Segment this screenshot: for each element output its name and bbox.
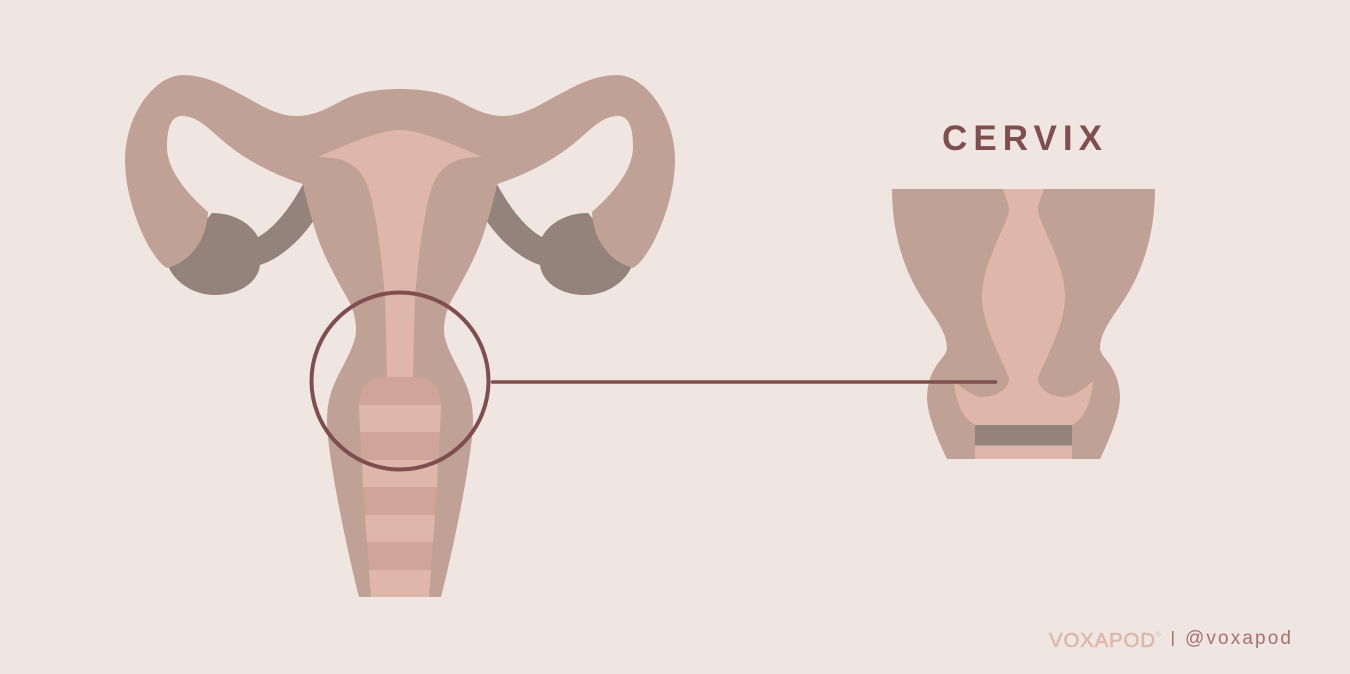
stripe 6 — [365, 515, 435, 542]
diagram: cervix close-up — [892, 189, 1155, 459]
stripe 1 — [359, 377, 441, 405]
stripe 2 — [359, 405, 441, 432]
stripe 4 — [362, 460, 438, 487]
registered mark: ® — [1156, 631, 1162, 639]
highlight circle around cervix — [312, 292, 488, 470]
diagram: female reproductive system — [125, 75, 675, 597]
stripe 8 — [369, 570, 431, 597]
cervix wall left — [892, 189, 1024, 459]
vaginal canal with stripes — [359, 377, 441, 597]
stripe 5 — [363, 487, 437, 515]
separator — [1172, 631, 1174, 646]
brand name: VOXAPOD — [1049, 629, 1155, 652]
uterus and right fallopian tube — [399, 75, 675, 597]
grey band — [975, 425, 1072, 446]
connector line — [492, 380, 996, 384]
uterus and left fallopian tube — [125, 75, 401, 597]
stripe 3 — [360, 432, 440, 460]
heading: CERVIX — [942, 119, 1103, 158]
icon: left ovary and ligament — [168, 184, 314, 295]
stripe 7 — [367, 542, 433, 570]
cervix wall right — [1023, 189, 1155, 459]
icon: right ovary and ligament — [486, 184, 632, 295]
social handle: @voxapod — [1185, 628, 1291, 649]
footer brand — [1049, 628, 1291, 652]
cervical canal right — [1023, 189, 1093, 459]
cervical canal left — [954, 189, 1024, 459]
uterine cavity and cervical canal — [318, 130, 482, 378]
